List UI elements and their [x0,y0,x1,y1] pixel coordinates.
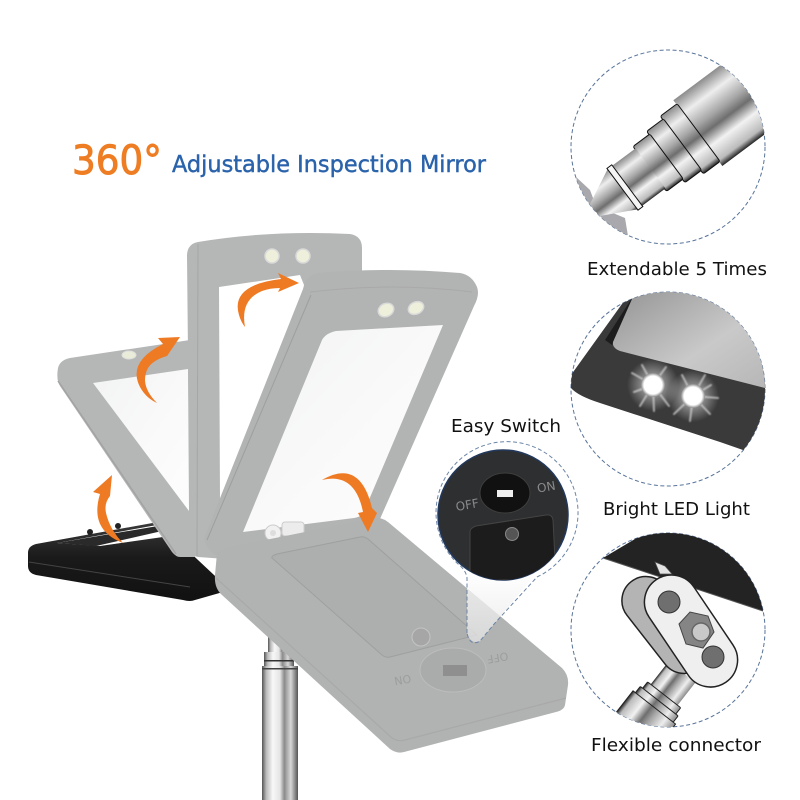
title text: Adjustable Inspection Mirror [172,152,487,178]
battery cover outline [272,537,477,657]
arrow: forward to back [322,473,377,532]
on text: ON [536,479,557,496]
telescopic pole [262,630,298,800]
arrow: upright to forward [238,273,299,327]
callout: easy switch [436,442,578,643]
bolt [692,623,710,641]
mirror glass [243,325,443,532]
switch slider [443,665,467,676]
arrow: low to upright [137,337,180,403]
detail circle: extendable tube [570,50,766,244]
LED [122,351,136,359]
pliers fragment [575,176,628,236]
title number: 360° [72,138,162,184]
black frame corner [603,530,770,612]
rear plate [621,576,686,674]
battery screw [506,528,518,540]
slide switch [480,473,530,513]
detail circle: LED light [570,292,766,486]
LEDs [265,249,279,263]
grey mirror panel: tilted forward position [205,270,478,555]
off label: OFF [486,649,509,666]
hex nut [679,612,714,648]
on label: ON [393,672,412,687]
mirror surface [612,292,765,388]
LED glow rays [632,365,718,421]
grey mirror panel: upright position [187,233,362,560]
rivet [655,562,672,574]
label: easy switch: Easy Switch [451,416,561,437]
hinge [265,522,304,541]
black frame [571,296,765,450]
mirror glass [93,369,189,511]
off text: OFF [455,496,480,514]
callout tail [467,572,537,642]
switch recess [420,648,486,692]
grey phone-shaped mirror back [215,518,568,753]
black base frame [28,522,230,601]
LEDs [376,301,396,319]
LED right [681,384,705,408]
mirror opening [219,275,310,500]
hole bottom [702,646,724,668]
hole top [658,591,680,613]
cover screw [412,628,430,646]
telescopic segments [590,65,764,216]
title [72,138,487,184]
label: LED: Bright LED Light [603,499,750,520]
LED glow [628,360,677,410]
battery cover [470,515,556,580]
grey mirror panel: left position [57,340,195,557]
arrow: base to low [93,475,123,543]
front plate [644,576,738,688]
LED left [641,373,665,397]
label: extendable: Extendable 5 Times [587,259,767,280]
dark photo [438,450,568,580]
label: connector: Flexible connector [591,735,762,756]
dashed callout outline [436,442,578,643]
lower tube [616,666,695,727]
detail circle: flexible connector [570,532,766,728]
